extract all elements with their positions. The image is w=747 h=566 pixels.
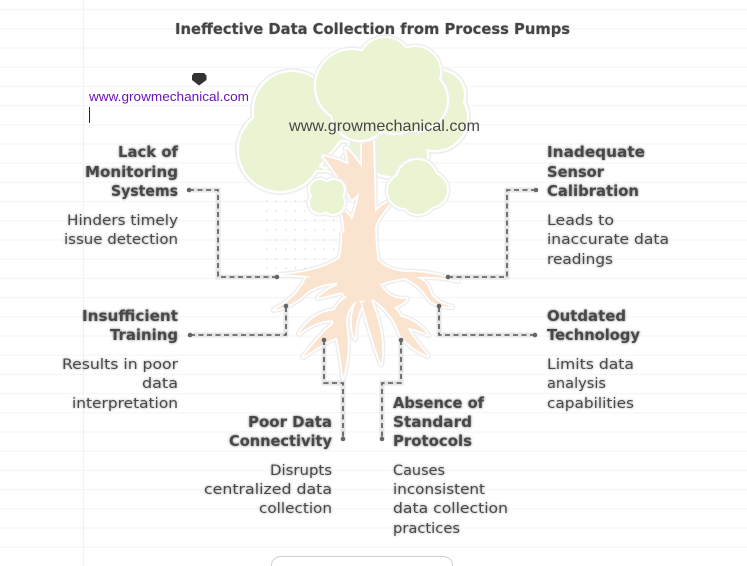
label: inadequate sensor calibration: readings xyxy=(547,252,613,268)
title: Ineffective Data Collection from Process Pumps xyxy=(175,20,570,38)
label: outdated technology: Limits data xyxy=(547,357,634,373)
grey website watermark: www.growmechanical.com xyxy=(288,118,480,135)
label: absence of standard protocols xyxy=(393,394,508,537)
label: outdated technology xyxy=(547,307,640,412)
label: inadequate sensor calibration xyxy=(547,143,669,268)
label: lack of monitoring systems xyxy=(64,143,178,248)
label: insufficient training: interpretation xyxy=(72,396,178,412)
label: lack of monitoring systems: Hinders timely xyxy=(67,213,178,229)
label: poor data connectivity xyxy=(204,413,332,517)
text cursor xyxy=(89,107,90,123)
purple website link: www.growmechanical.com xyxy=(88,89,249,104)
label: inadequate sensor calibration: Calibration xyxy=(547,182,639,200)
label: inadequate sensor calibration: inaccurate data xyxy=(547,232,669,248)
connector: absence of standard protocols xyxy=(380,338,403,441)
bottom card edge xyxy=(272,556,452,566)
label: poor data connectivity: Poor Data xyxy=(248,413,332,431)
label: lack of monitoring systems: Systems xyxy=(111,182,178,200)
label: outdated technology: Outdated xyxy=(547,307,626,325)
connector: inadequate sensor calibration xyxy=(446,188,538,279)
label: poor data connectivity: Connectivity xyxy=(229,432,332,450)
label: absence of standard protocols: inconsistent xyxy=(393,482,485,498)
tree illustration xyxy=(239,38,467,378)
label: poor data connectivity: centralized data xyxy=(204,482,332,498)
connector: insufficient training xyxy=(188,304,288,337)
label: poor data connectivity: Disrupts xyxy=(270,463,332,479)
label: absence of standard protocols: practices xyxy=(393,521,460,537)
label: insufficient training: Training xyxy=(110,326,178,344)
connector: poor data connectivity xyxy=(322,338,345,441)
label: lack of monitoring systems: Lack of xyxy=(118,143,178,161)
label: outdated technology: Technology xyxy=(547,326,640,344)
label: lack of monitoring systems: issue detection xyxy=(64,232,178,248)
label: absence of standard protocols: data collection xyxy=(393,501,508,517)
label: insufficient training xyxy=(62,307,178,412)
label: inadequate sensor calibration: Sensor xyxy=(547,163,605,181)
label: insufficient training: Results in poor xyxy=(62,357,178,373)
label: inadequate sensor calibration: Leads to xyxy=(547,213,614,229)
label: absence of standard protocols: Causes xyxy=(393,463,445,479)
canopy: back blobs xyxy=(239,71,467,191)
label: poor data connectivity: collection xyxy=(259,501,332,517)
label: outdated technology: capabilities xyxy=(547,396,634,412)
canopy: small blobs xyxy=(310,160,447,214)
label: insufficient training: data xyxy=(142,376,178,392)
label: absence of standard protocols: Protocols xyxy=(393,432,472,450)
label: lack of monitoring systems: Monitoring xyxy=(85,163,178,181)
label: insufficient training: Insufficient xyxy=(82,307,178,325)
canopy: front blob xyxy=(316,38,447,140)
connector: outdated technology xyxy=(437,304,537,337)
label: outdated technology: analysis xyxy=(547,376,606,392)
label: absence of standard protocols: Standard xyxy=(393,413,472,431)
trunk and roots xyxy=(274,135,458,378)
connector: lack of monitoring systems xyxy=(187,188,279,279)
label: absence of standard protocols: Absence of xyxy=(393,394,484,412)
icon: dark marker xyxy=(192,73,206,86)
label: inadequate sensor calibration: Inadequate xyxy=(547,143,645,161)
